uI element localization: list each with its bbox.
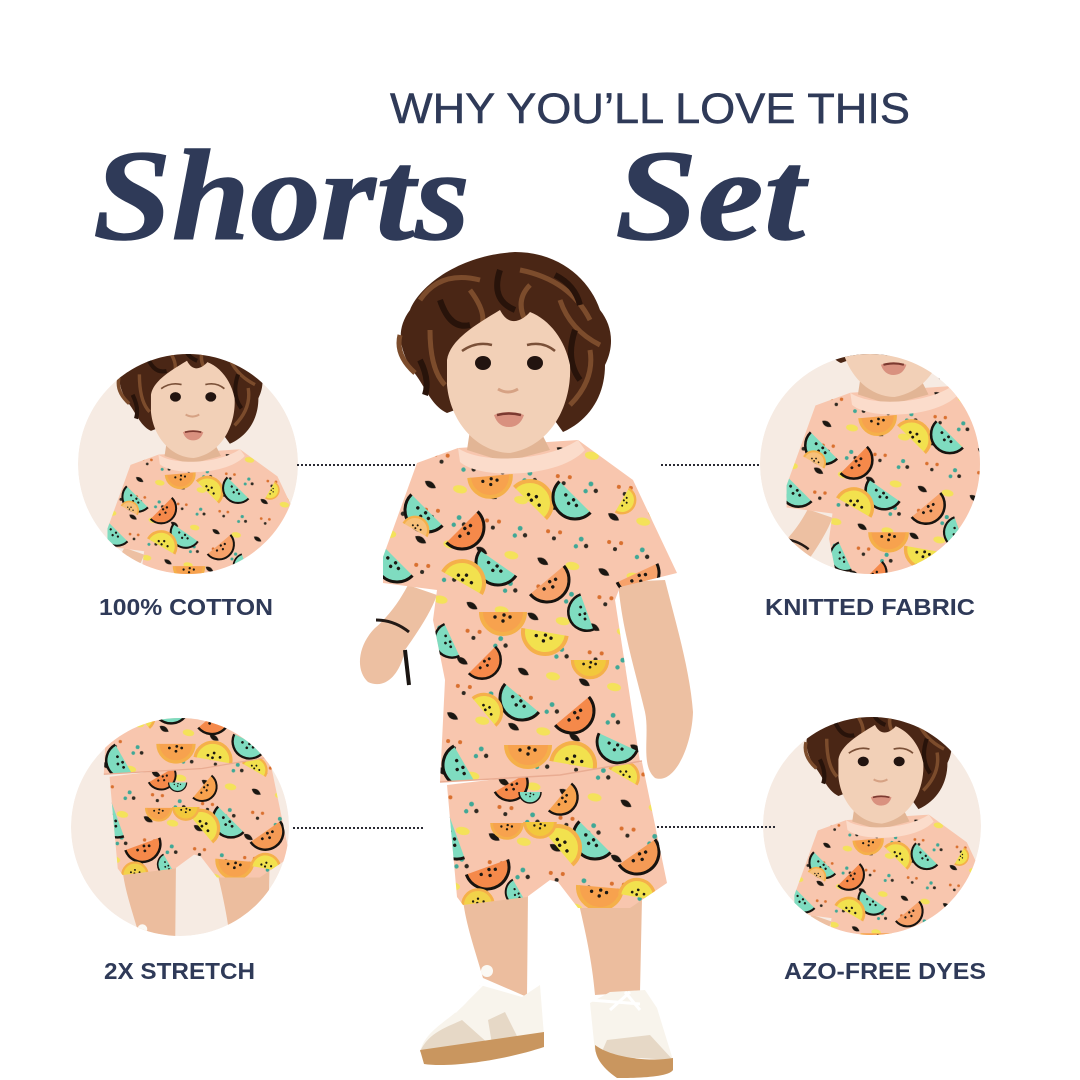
label: 2x stretch: 2X STRETCH xyxy=(104,958,255,984)
main photo: child in fruit-print shorts set xyxy=(360,252,693,1078)
dotted connector lines xyxy=(293,465,775,828)
circle photo: stretch xyxy=(71,718,289,936)
circle photo: knitted fabric xyxy=(760,354,980,574)
feature: azo-free dyes xyxy=(763,717,985,979)
title: shorts set: Set xyxy=(615,124,809,268)
heading: why you'll love this: WHY YOU’LL LOVE THIS xyxy=(390,85,910,133)
feature: 100% cotton xyxy=(78,354,298,615)
feature: 2x stretch xyxy=(71,718,289,979)
title: shorts set: Shorts xyxy=(93,124,470,268)
circle photo: azo-free dyes xyxy=(763,717,981,935)
title: shorts set xyxy=(93,124,809,268)
feature: knitted fabric xyxy=(760,354,980,615)
label: knitted fabric: KNITTED FABRIC xyxy=(765,594,975,620)
label: azo-free dyes: AZO-FREE DYES xyxy=(784,958,986,984)
circle photo: cotton xyxy=(78,354,298,574)
label: 100% cotton: 100% COTTON xyxy=(99,594,273,620)
